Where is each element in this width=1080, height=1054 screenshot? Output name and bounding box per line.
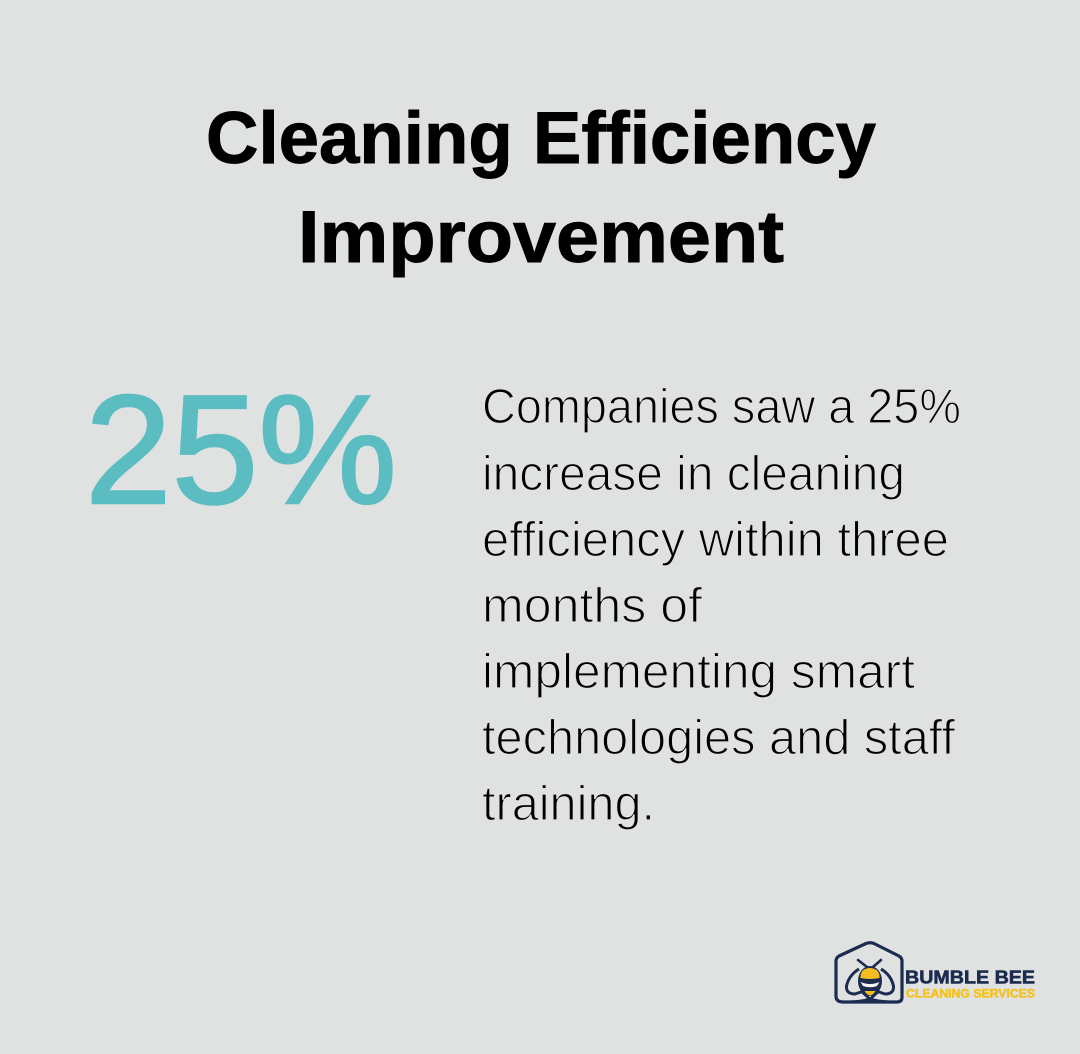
description text block: technologies and staff [482,711,955,765]
logo wordmark: BUMBLE BEE [905,966,1035,988]
description text block: increase in cleaning [482,447,905,501]
description text block: Companies saw a 25% [482,380,961,434]
description text block [482,380,961,831]
description text block: months of [482,579,702,633]
title [206,98,876,278]
icon: house with bee [836,943,902,1002]
title: Improvement [298,197,784,278]
description text block: efficiency within three [482,513,949,567]
logo: Bumble Bee Cleaning Services [836,943,1035,1002]
logo tagline: CLEANING SERVICES [906,988,1035,1000]
title: Cleaning Efficiency [206,98,876,179]
description text block: training. [482,777,655,831]
big stat: 25%: 25% [85,363,397,536]
description text block: implementing smart [482,645,915,699]
